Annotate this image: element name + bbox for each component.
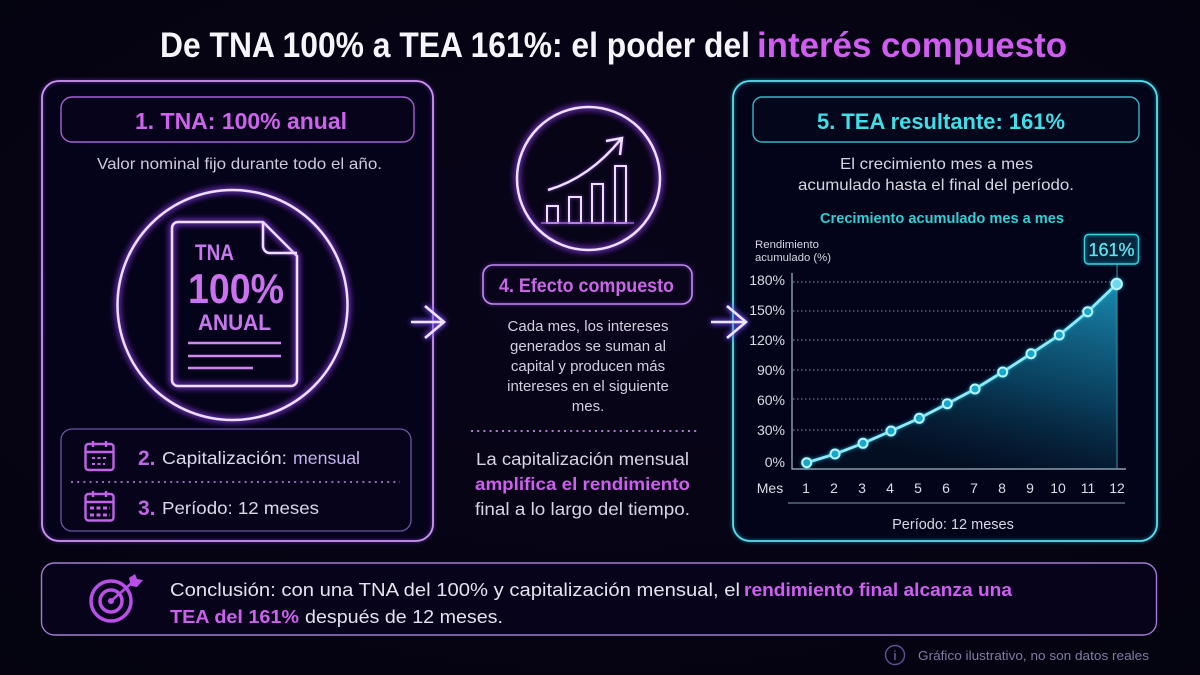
panel: capitalization and period [61,429,411,531]
panel: TNA [42,81,433,541]
title: interés compuesto [757,26,1067,65]
text: capitalization [138,447,360,470]
y axis labels: 90% [757,362,785,378]
icon: target with arrow [91,574,143,621]
x axis labels: 8 [998,480,1006,496]
chart heading: Crecimiento acumulado mes a mes [820,211,1064,227]
text: TEA description [798,156,1074,194]
panel: TEA [733,81,1157,541]
heading: TNA: 1. TNA: 100% anual [135,108,347,134]
panel: conclusion [42,563,1156,635]
y axis labels: 0% [765,454,785,470]
x axis labels: 4 [886,480,894,496]
title: De TNA 100% a TEA 161%: el poder del [160,26,750,65]
text: nominal value: Valor nominal fijo durante todo el año. [97,156,382,173]
callout: 161%: 161% [1088,240,1135,260]
y axis title: Rendimiento [755,239,819,251]
text: compound explanation [507,318,669,415]
text: compound explanation: Cada mes, los intereses [508,318,668,335]
text: capitalization: Capitalización: [162,448,287,468]
y axis labels [749,272,785,470]
heading: compound effect [483,265,692,304]
x axis labels: 2 [830,480,838,496]
text: compound explanation: intereses en el siguiente [507,378,669,395]
text: conclusion: TEA del 161% [170,606,299,627]
x axis labels: 3 [858,480,866,496]
icon: TNA document: TNA [195,240,234,265]
footnote [886,646,1149,664]
text: monthly capitalization note: final a lo largo del tiempo. [475,499,690,519]
icon: TNA document: ANUAL [198,310,271,335]
icon: calendar monthly [86,441,114,470]
y axis title [755,239,831,264]
y axis labels: 30% [757,422,785,438]
text: period: Período: 12 meses [162,498,319,518]
heading: compound effect: 4. Efecto compuesto [499,276,674,297]
x axis labels: 9 [1026,480,1034,496]
text: conclusion: después de 12 meses. [305,606,503,627]
y axis labels: 180% [749,272,785,288]
text: conclusion: Conclusión: con una TNA del 100% y capitalización mensual, el [170,579,740,600]
icon: growth chart [517,107,660,250]
text: conclusion: rendimiento final alcanza una [744,579,1013,600]
y axis labels: 60% [757,392,785,408]
x axis labels: 1 [802,480,810,496]
text: compound explanation: capital y producen más [511,358,665,375]
icon: info: i [894,648,897,663]
text: period: 3. [138,497,156,520]
y axis title: acumulado (%) [755,252,831,264]
text: monthly capitalization note: La capitalización mensual [476,449,689,469]
icon: info [886,646,904,664]
arrow: compound effect to TEA [711,306,746,338]
panel: compound effect [471,107,697,519]
x axis labels: 5 [914,480,922,496]
x axis labels [757,480,1125,496]
y axis labels: 150% [749,302,785,318]
x axis labels: 7 [970,480,978,496]
line chart: cumulative growth [749,234,1138,533]
text: compound explanation: generados se suman al [510,338,666,355]
text: capitalization: 2. [138,447,156,470]
arrow: TNA to compound effect [411,306,444,338]
x axis labels: 10 [1050,480,1066,496]
text: compound explanation: mes. [572,398,604,415]
icon: TNA document: 100% [188,265,284,312]
text: TEA description: El crecimiento mes a mes [840,156,1033,173]
callout: 161% [1084,234,1138,264]
x axis labels: 12 [1109,480,1125,496]
text: monthly capitalization note: amplifica el rendimiento [475,474,690,494]
icon: calendar period [86,491,114,520]
heading: TEA [753,97,1139,142]
text: capitalization: mensual [293,448,360,468]
text: monthly capitalization note [475,449,690,519]
x axis labels: 6 [942,480,950,496]
x axis caption: Período: 12 meses [892,517,1014,533]
icon: TNA document [118,190,348,420]
text: TEA description: acumulado hasta el final del período. [798,177,1074,194]
footnote: Gráfico ilustrativo, no son datos reales [918,649,1149,663]
heading: TEA: 5. TEA resultante: 161% [817,109,1065,134]
text: conclusion [170,579,1013,627]
heading: TNA [61,97,414,142]
y axis labels: 120% [749,332,785,348]
x axis labels: 11 [1081,480,1095,496]
x axis labels: Mes [757,480,783,496]
